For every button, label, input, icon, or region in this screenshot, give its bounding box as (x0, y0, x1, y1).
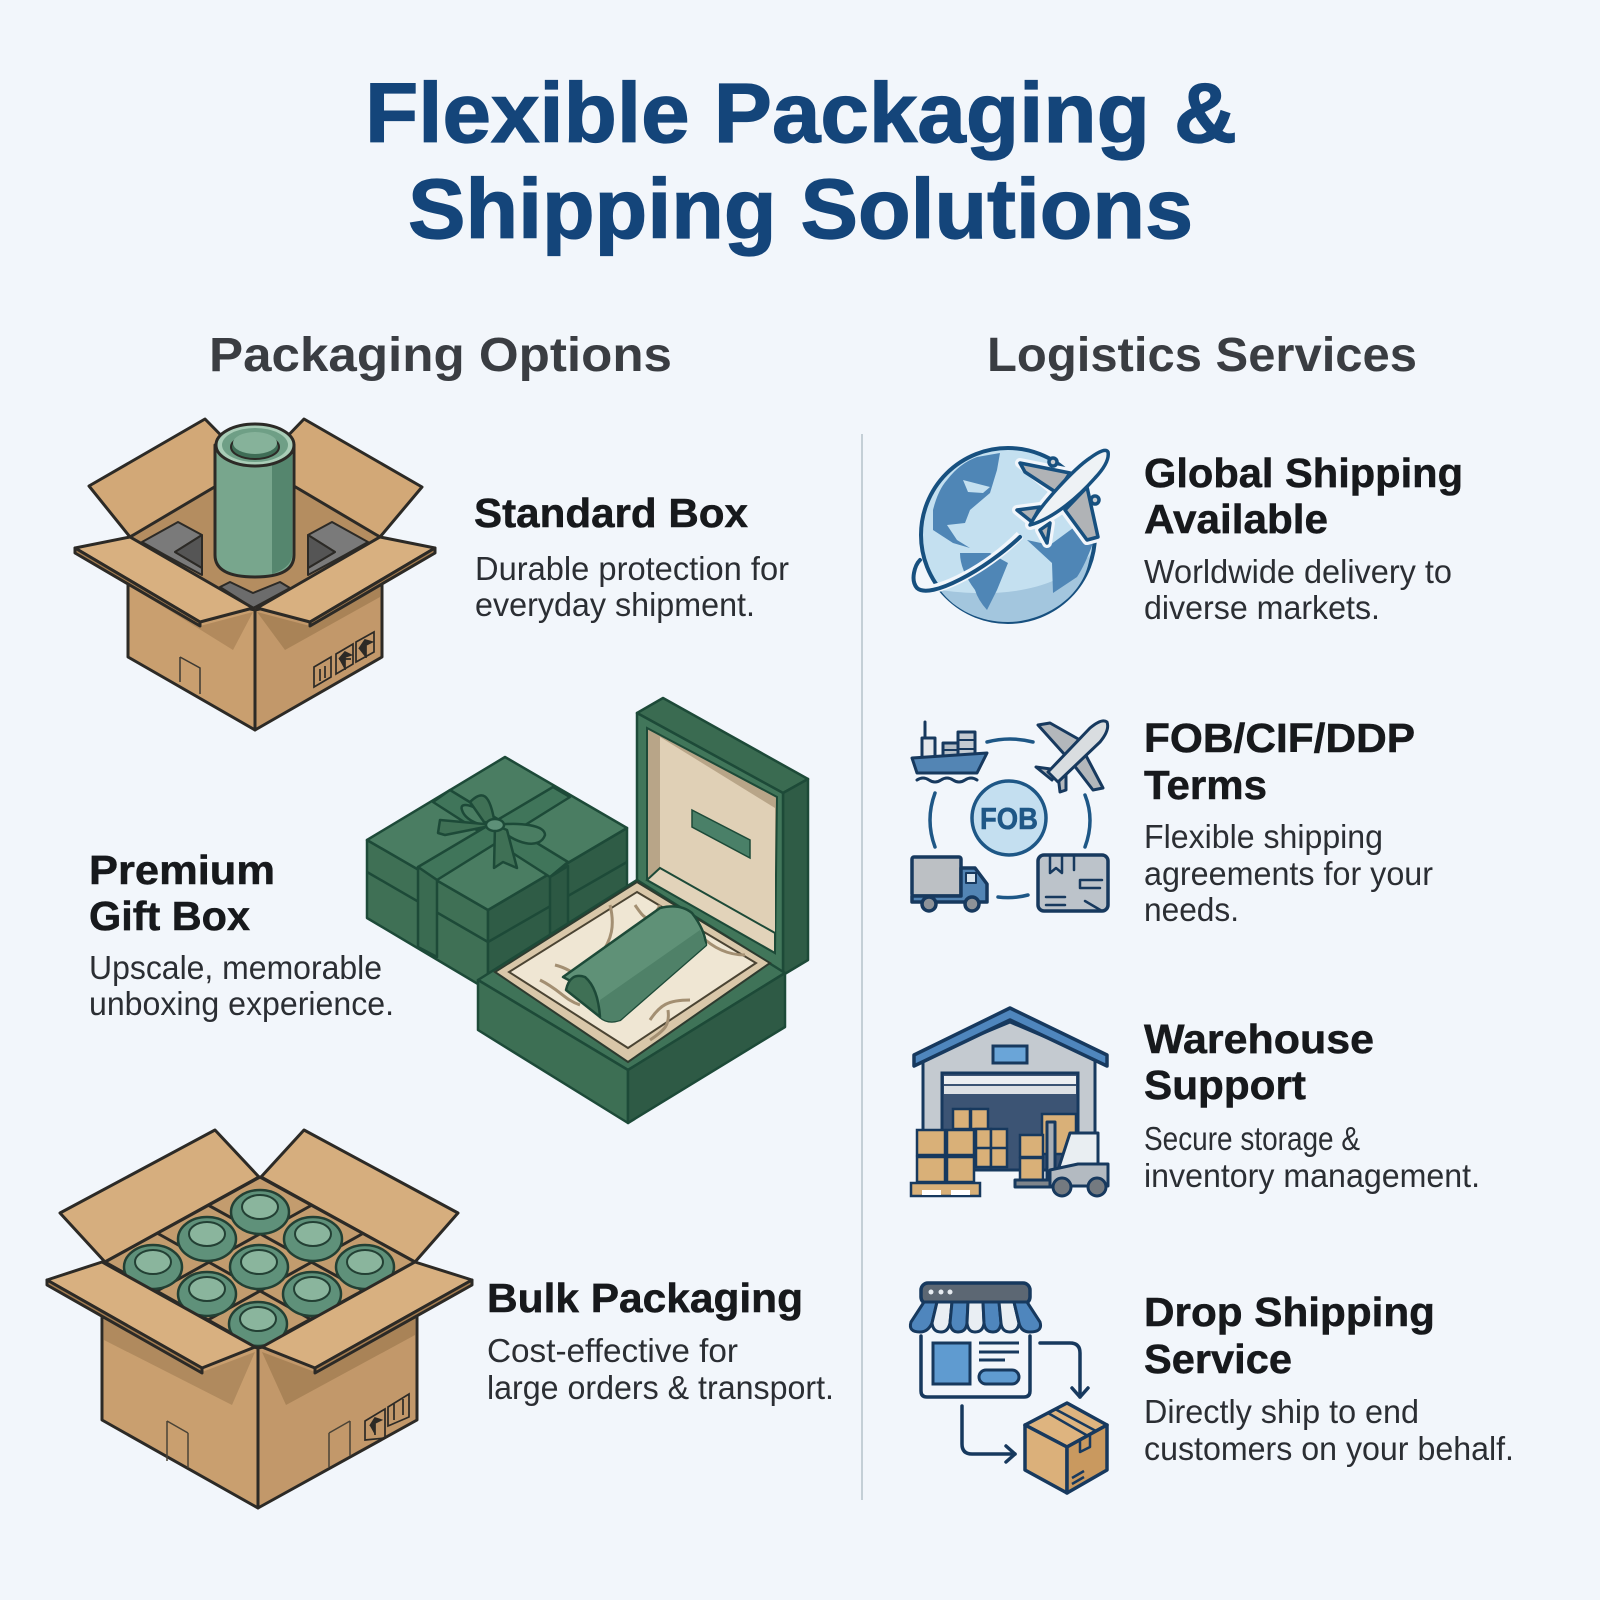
text: bulk packaging: large orders & transport. (487, 1369, 834, 1406)
truck (912, 857, 987, 911)
awning (910, 1302, 1041, 1332)
icon: drop shipping storefront (910, 1283, 1107, 1493)
title: Shipping Solutions (408, 162, 1193, 256)
text: standard box (474, 490, 789, 623)
text: FOB terms: Flexible shipping (1144, 818, 1383, 855)
forklift (1015, 1122, 1108, 1196)
illustration: standard box (75, 419, 435, 730)
text: standard box: everyday shipment. (475, 586, 755, 623)
text: global shipping: Worldwide delivery to (1144, 553, 1452, 590)
text: FOB terms: agreements for your (1144, 855, 1433, 892)
text: FOB terms (1144, 715, 1433, 928)
icon: warehouse (911, 1008, 1108, 1196)
text: global shipping: Available (1144, 496, 1328, 542)
text: warehouse support: Warehouse (1144, 1016, 1374, 1062)
panel: logistics services (910, 448, 1514, 1493)
handling marks (365, 1394, 409, 1440)
ship (912, 722, 987, 782)
text: standard box: Standard Box (474, 490, 748, 536)
FOB badge: FOB (980, 801, 1038, 836)
heading: packaging options: Packaging Options (209, 329, 672, 382)
stacked boxes (917, 1109, 1076, 1182)
text: drop shipping: Drop Shipping (1144, 1289, 1435, 1335)
illustration: bulk packaging box (47, 1130, 472, 1508)
cans (124, 1190, 394, 1346)
product cylinder (215, 424, 294, 577)
parcel (1038, 855, 1108, 911)
cushion cylinder (563, 906, 706, 1021)
text: premium gift box: unboxing experience. (89, 985, 394, 1022)
text: warehouse support: Secure storage & (1144, 1120, 1360, 1157)
cell dividers (157, 1205, 362, 1320)
text: drop shipping: Service (1144, 1336, 1292, 1382)
text: FOB terms: needs. (1144, 891, 1239, 928)
cycle arcs (930, 739, 1090, 898)
illustration: closed gift box (367, 757, 627, 1000)
text: premium gift box: Premium (89, 847, 275, 893)
text: premium gift box: Gift Box (89, 893, 250, 939)
text: premium gift box (89, 847, 394, 1022)
handling marks (314, 632, 374, 687)
text: bulk packaging: Cost-effective for (487, 1332, 738, 1369)
title (365, 66, 1237, 256)
title: Flexible Packaging & (365, 66, 1237, 160)
text: global shipping: Global Shipping (1144, 450, 1463, 496)
text: drop shipping: customers on your behalf. (1144, 1430, 1514, 1467)
pallet (911, 1183, 980, 1196)
bow (438, 795, 545, 868)
text: standard box: Durable protection for (475, 550, 789, 587)
text: bulk packaging: Bulk Packaging (487, 1275, 803, 1321)
foam inserts (142, 522, 368, 608)
text: premium gift box: Upscale, memorable (89, 949, 382, 986)
illustration: open gift box (478, 698, 808, 1123)
text: global shipping (1144, 450, 1463, 626)
text: global shipping: diverse markets. (1144, 589, 1380, 626)
text: warehouse support: inventory management. (1144, 1157, 1480, 1194)
text: warehouse support (1144, 1016, 1480, 1194)
text: warehouse support: Support (1144, 1062, 1306, 1108)
FOB badge (972, 781, 1046, 855)
text: bulk packaging (487, 1275, 834, 1406)
text: FOB terms: FOB/CIF/DDP (1144, 715, 1415, 761)
heading: logistics services: Logistics Services (987, 329, 1417, 382)
lid plaque (692, 810, 750, 858)
icon: globe and plane (914, 448, 1108, 622)
text: drop shipping (1144, 1289, 1514, 1467)
icon: FOB cycle (912, 721, 1108, 911)
parcel (1025, 1403, 1107, 1493)
plane (1036, 721, 1108, 792)
arrows (962, 1343, 1088, 1462)
panel: packaging options (47, 419, 834, 1508)
text: FOB terms: Terms (1144, 762, 1267, 808)
text: drop shipping: Directly ship to end (1144, 1393, 1419, 1430)
